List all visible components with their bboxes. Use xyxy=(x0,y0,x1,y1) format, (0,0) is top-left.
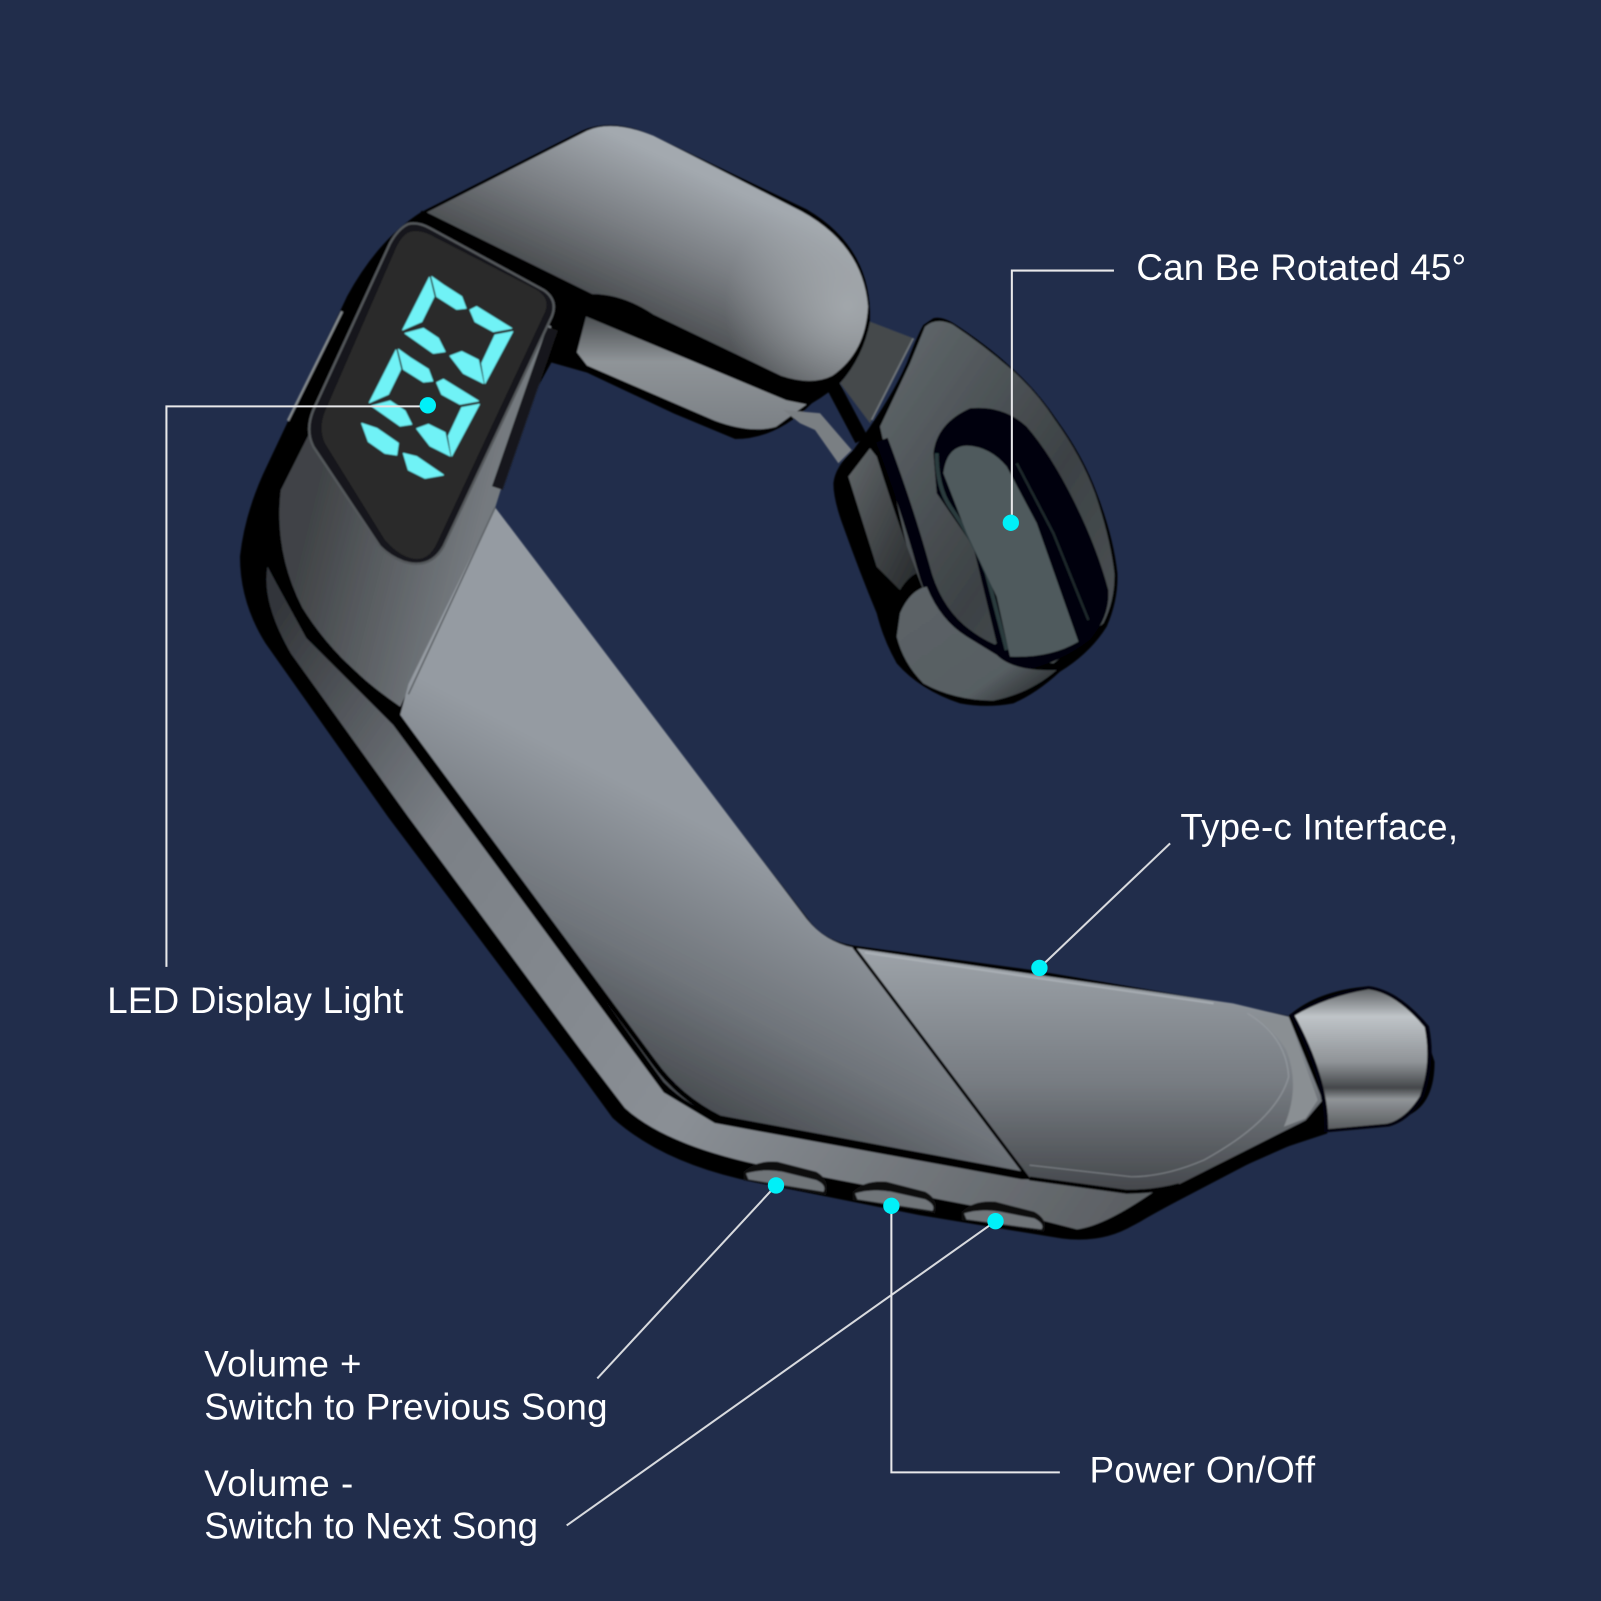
black strip between bow and neck xyxy=(832,383,862,440)
leader line xyxy=(567,1221,996,1525)
right groove highlight xyxy=(1017,463,1088,620)
ear face xyxy=(880,321,1114,663)
button: volume down xyxy=(962,1202,1045,1232)
lower black wedge xyxy=(1102,1112,1327,1235)
lower digit xyxy=(369,349,479,456)
marker dot xyxy=(768,1177,784,1194)
bow surface xyxy=(427,126,868,381)
extra bottom segments xyxy=(362,423,443,478)
arm seam xyxy=(854,947,1029,1178)
callout: volume down xyxy=(204,1213,1004,1547)
product: ear hook headset xyxy=(240,125,1435,1240)
callout: LED display xyxy=(107,397,436,1021)
ear silhouette xyxy=(833,318,1117,706)
housing surface below the display xyxy=(279,227,551,707)
bottom lobe xyxy=(897,587,1057,701)
label: Power On/Off xyxy=(1089,1450,1316,1491)
bud tip xyxy=(1292,988,1429,1131)
swivel highlight xyxy=(872,338,913,420)
display bezel xyxy=(309,223,554,564)
LED display xyxy=(309,223,554,564)
housing right dark rim xyxy=(497,329,552,488)
swivel neck xyxy=(840,322,913,423)
marker dot xyxy=(1003,515,1019,531)
button: volume up xyxy=(744,1162,827,1195)
label: Type-c Interface, xyxy=(1180,806,1458,847)
seam line on arm xyxy=(408,507,495,694)
marker dot xyxy=(883,1198,900,1214)
callout: rotation xyxy=(1003,247,1466,531)
leader line xyxy=(1039,843,1170,968)
connector arm under the bow xyxy=(577,317,807,429)
right arm surface xyxy=(856,948,1323,1192)
front arm, tip and buttons xyxy=(744,947,1429,1235)
pad edge xyxy=(937,453,1007,650)
label: LED Display Light xyxy=(107,980,403,1021)
label: Volume - xyxy=(204,1463,353,1504)
inner black groove xyxy=(278,551,1024,1174)
callout: volume up xyxy=(204,1177,784,1427)
rim highlight on left edge xyxy=(288,311,342,421)
swivel stem xyxy=(783,410,852,463)
sublabel: Switch to Previous Song xyxy=(204,1386,608,1427)
black groove wrapping the lower left xyxy=(882,440,1000,653)
bow highlight xyxy=(427,126,868,381)
display screen xyxy=(322,231,546,559)
button: power xyxy=(853,1182,936,1213)
leader line xyxy=(166,406,428,967)
label: Can Be Rotated 45° xyxy=(1136,247,1466,288)
sublabel: Switch to Next Song xyxy=(204,1506,538,1547)
callout: type-c xyxy=(1031,806,1458,976)
long arm surface xyxy=(400,507,1024,1174)
leader line xyxy=(597,1185,776,1378)
inner pad xyxy=(943,446,1078,657)
recess xyxy=(933,408,1109,672)
label: Volume + xyxy=(204,1343,361,1384)
digit segments xyxy=(362,277,513,478)
leader line xyxy=(891,1206,1060,1472)
marker dot xyxy=(1031,960,1048,976)
marker dot xyxy=(420,397,436,414)
upper bow xyxy=(421,126,868,381)
bud collar xyxy=(1257,1018,1318,1127)
headset black silhouette xyxy=(240,125,1435,1240)
callout: power xyxy=(883,1198,1316,1491)
lower edge band xyxy=(266,567,1164,1229)
bow seam xyxy=(421,212,592,302)
upper digit xyxy=(403,277,513,383)
leader line xyxy=(1012,271,1114,523)
ear piece xyxy=(783,318,1117,706)
right arm inner contour xyxy=(1029,1013,1289,1177)
marker dot xyxy=(987,1213,1004,1229)
lower black line xyxy=(1029,1178,1180,1192)
left strip xyxy=(848,448,917,590)
top edge highlight xyxy=(865,953,1214,1003)
